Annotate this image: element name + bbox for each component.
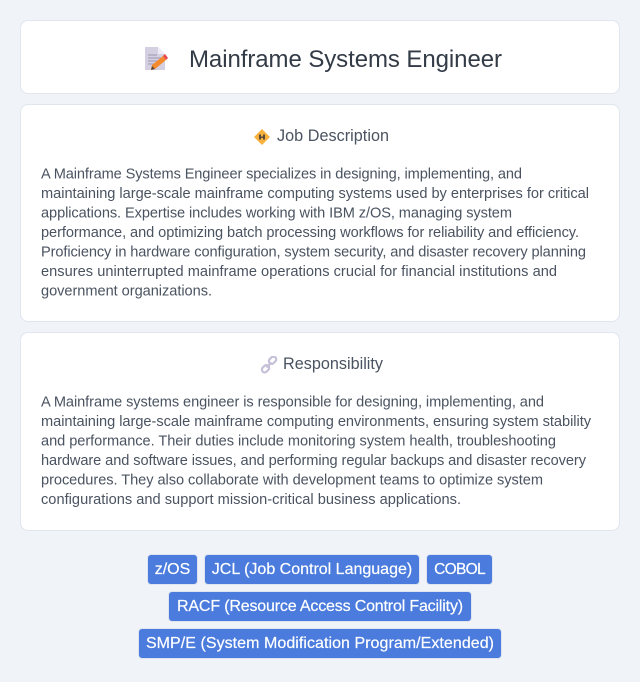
icon: orange diamond (254, 129, 270, 145)
tag: RACF (168, 591, 472, 622)
title: Mainframe Systems Engineer (189, 46, 502, 73)
text block: job description: maintaining large-scale mainframe computing systems used by enterprises for critical (41, 186, 589, 202)
text block: responsibility: A Mainframe systems engineer is responsible for designing, implementing, and (41, 394, 544, 410)
tag: COBOL (426, 554, 493, 585)
text block: responsibility: hardware and software issues, and performing regular backups and disaster recovery (41, 453, 587, 469)
text block: job description: performance, and optimizing batch processing workflows for reliability and efficiency. (41, 225, 579, 241)
tag: z/OS: z/OS (155, 561, 190, 578)
tag: JCL: JCL (Job Control Language) (212, 561, 412, 578)
text block: responsibility: maintaining large-scale mainframe computing environments, ensuring system stability (41, 414, 592, 430)
heading: responsibility: Responsibility (283, 355, 384, 373)
icon: chain link (260, 356, 278, 374)
text block: responsibility: configurations and support mission-critical business applications. (41, 492, 461, 508)
text block: job description: applications. Expertise includes working with IBM z/OS, managing system (41, 206, 512, 222)
tag: RACF: RACF (Resource Access Control Facility) (177, 598, 463, 615)
tag: SMP/E: SMP/E (System Modification Program/Extended) (146, 635, 494, 652)
text block: job description: government organizations. (41, 284, 212, 300)
panel: title card (20, 20, 620, 94)
panel: responsibility (20, 332, 620, 531)
text block: job description: ensures uninterrupted mainframe operations crucial for financial institutions and (41, 264, 557, 280)
tag: COBOL: COBOL (434, 561, 485, 578)
text block: job description (41, 166, 589, 300)
icon: document with pencil (145, 47, 168, 70)
tag: SMP/E (138, 628, 502, 659)
text block: responsibility: procedures. They also collaborate with development teams to optimize system (41, 472, 543, 488)
tag: z/OS (147, 554, 198, 585)
text block: responsibility: and performance. Their duties include monitoring system health, troubleshooting (41, 434, 556, 450)
text block: responsibility (41, 394, 592, 508)
panel: job description (20, 104, 620, 322)
tag: JCL (204, 554, 420, 585)
text block: job description: Proficiency in hardware configuration, system security, and disaster recovery planning (41, 244, 586, 260)
text block: job description: A Mainframe Systems Engineer specializes in designing, implementing, and (41, 166, 522, 182)
heading: job description: Job Description (277, 127, 389, 145)
